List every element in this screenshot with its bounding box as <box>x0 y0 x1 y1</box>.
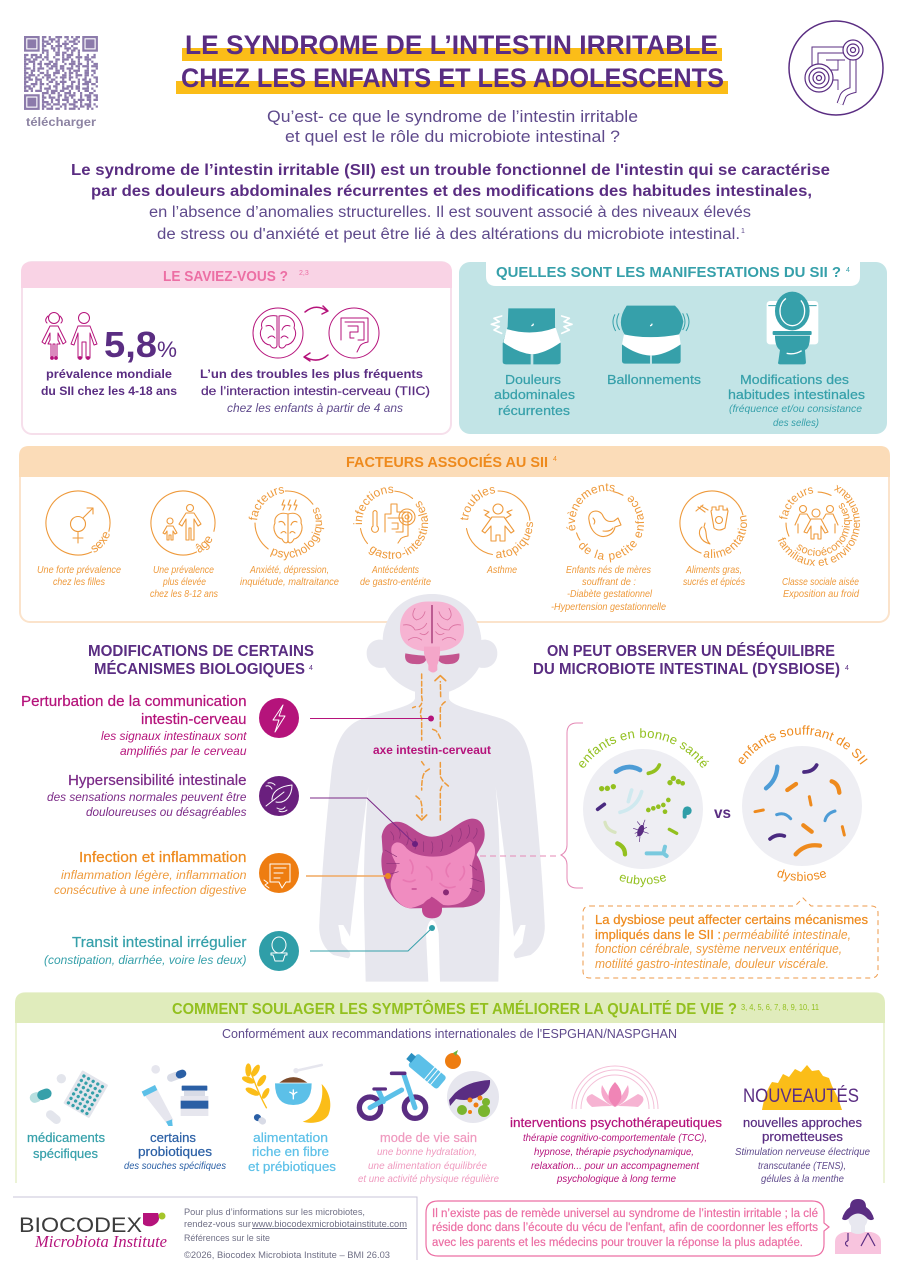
mechanism: infection: inflammation légère, inflammation <box>61 868 247 882</box>
callout: conclusion <box>426 1201 829 1256</box>
mechanism: transit: (constipation, diarrhée, voire les deux) <box>44 953 247 967</box>
subtitle: et quel est le rôle du microbiote intestinal ? <box>285 128 620 146</box>
heading: modifications biologiques <box>88 643 314 678</box>
factor: socioéconomiques: Classe sociale aisée <box>782 576 859 588</box>
labels: symptoms: Ballonnements <box>607 372 702 387</box>
labels: symptoms: (fréquence et/ou consistance <box>729 403 862 415</box>
factor: sexe: chez les filles <box>53 576 106 588</box>
label: mode de vie <box>358 1130 499 1185</box>
heading: facteurs: FACTEURS ASSOCIÉS AU SII <box>346 454 548 471</box>
heading: manifestations: QUELLES SONT LES MANIFESTATIONS DU SII ? <box>496 265 841 281</box>
text: recommandations: Conformément aux recommandations internationales de l'ESPGHAN/NASPGHAN <box>222 1026 677 1041</box>
factor: sexe: Une forte prévalence <box>37 564 121 576</box>
label: médicaments <box>27 1130 106 1161</box>
statistic 5,8%: % <box>157 337 177 362</box>
icon: inflamed intestine <box>259 853 299 893</box>
factor: évènements de la petite enfance <box>551 483 666 613</box>
mechanism: communication <box>21 694 434 758</box>
icon: bloating <box>613 306 689 364</box>
intro text block: par des douleurs abdominales récurrentes et des modifications des habitudes intestinales, <box>91 183 812 200</box>
footer text <box>184 1207 407 1261</box>
text: troubles <box>200 367 430 415</box>
logo: Biocodex: Microbiota Institute <box>34 1232 167 1251</box>
label: mode de vie: mode de vie sain <box>380 1130 477 1145</box>
heading: modifications biologiques: 4 <box>309 665 313 672</box>
label: nouvelles approches: gélules à la menthe <box>761 1173 844 1185</box>
callout: dysbiose: perméabilité intestinale, <box>722 928 851 942</box>
icon: nouveautés sun <box>743 1065 859 1110</box>
panel: facteurs associés <box>19 446 890 623</box>
factor: évènements de la petite enfance: -Diabète gestationnel <box>567 588 653 600</box>
label: alimentation <box>248 1130 337 1174</box>
heading: soulager: 3, 4, 5, 6, 7, 8, 9, 10, 11 <box>741 1003 820 1012</box>
label: nouvelles approches: prometteuses <box>762 1129 844 1144</box>
panel: soulager les symptômes <box>15 993 885 1185</box>
text: prevalence: prévalence mondiale <box>46 367 172 381</box>
labels: symptoms: récurrentes <box>498 403 571 418</box>
chart: eubiosis circle: eubyose <box>620 874 666 888</box>
factor: évènements de la petite enfance: -Hypertension gestationnelle <box>551 601 666 613</box>
label: mode de vie: une alimentation équilibrée <box>368 1160 487 1172</box>
factor: psychologiques: Anxiété, dépression, <box>249 564 329 576</box>
panel: le saviez-vous <box>21 262 452 434</box>
mechanism: communication: intestin-cerveau <box>141 712 246 728</box>
mechanism: communication: Perturbation de la communication <box>21 694 246 710</box>
factor: évènements de la petite enfance: souffrant de : <box>582 576 636 588</box>
mechanism: transit: Transit intestinal irrégulier <box>72 935 247 951</box>
title <box>176 30 728 94</box>
factor: infections gastro-intestinales: infections <box>353 486 394 524</box>
icon: fibre food <box>241 1063 330 1126</box>
text: troubles: chez les enfants à partir de 4 ans <box>227 403 403 415</box>
icon: nouveautés sun: NOUVEAUTÉS <box>743 1086 859 1107</box>
statistic 5,8%: 5,8 <box>104 324 157 365</box>
factor: troubles atopiques: Asthme <box>486 564 517 576</box>
heading: modifications biologiques: MODIFICATIONS DE CERTAINS <box>88 643 314 660</box>
mechanism: hypersensibilité: douloureuses ou désagréables <box>86 805 246 819</box>
labels: symptoms: habitudes intestinales <box>728 387 866 402</box>
factor: alimentation: alimentation <box>704 515 748 558</box>
callout: dysbiose <box>583 898 878 978</box>
label: mode de vie: et une activité physique régulière <box>358 1173 499 1185</box>
label: interventions: interventions psychothérapeutiques <box>510 1115 723 1130</box>
factor: alimentation: sucrés et épicés <box>683 576 746 588</box>
title: CHEZ LES ENFANTS ET LES ADOLESCENTS <box>181 63 724 93</box>
callout: conclusion: Il n’existe pas de remède universel au syndrome de l’intestin irritable ; la clé <box>432 1208 818 1220</box>
icon: doctor <box>835 1199 881 1254</box>
axis label: axe intestin-cerveaut <box>373 745 491 757</box>
icon: children <box>42 312 97 359</box>
callout: conclusion: avec les parents et les médecins pour trouver la réponse la plus adaptée. <box>432 1237 803 1249</box>
heading: dysbiose: DU MICROBIOTE INTESTINAL (DYSBIOSE) <box>533 661 840 678</box>
footer text: ©2026, Biocodex Microbiota Institute – BMI 26.03 <box>184 1250 390 1261</box>
chart: dysbiosis circle <box>738 725 868 882</box>
text: prevalence <box>41 367 177 398</box>
labels: symptoms <box>494 372 866 429</box>
axis arrows <box>413 674 448 820</box>
factor: évènements de la petite enfance: évènements <box>566 483 615 531</box>
factor: âge: chez les 8-12 ans <box>150 588 219 600</box>
factor: socioéconomiques: Exposition au froid <box>783 588 860 600</box>
dashed link and bracket <box>480 723 583 888</box>
factor: infections gastro-intestinales: de gastro-entérite <box>360 576 431 588</box>
title: LE SYNDROME DE L’INTESTIN IRRITABLE <box>185 30 718 60</box>
factor: infections gastro-intestinales <box>353 486 431 588</box>
intro text block <box>71 162 830 243</box>
icon: toilet <box>767 292 818 364</box>
mechanism: infection: Infection et inflammation <box>79 850 246 866</box>
label: probiotiques: probiotiques <box>138 1144 213 1159</box>
callout: dysbiose: impliqués dans le SII : <box>595 928 721 942</box>
intro text block: Le syndrome de l’intestin irritable (SII) est un trouble fonctionnel de l'intestin qui se caractérise <box>71 162 830 179</box>
icon: probiotics <box>142 1065 208 1126</box>
icon: feather <box>259 776 299 816</box>
mechanism: hypersensibilité: Hypersensibilité intestinale <box>68 773 246 789</box>
text: troubles: L’un des troubles les plus fréquents <box>200 367 423 381</box>
heading: dysbiose: 4 <box>845 665 849 672</box>
icon: abdominal pain <box>491 308 572 364</box>
factor: âge: plus élevée <box>162 576 206 588</box>
factor: alimentation: Aliments gras, <box>685 564 742 576</box>
heading: le saviez-vous: LE SAVIEZ-VOUS ? <box>163 269 288 285</box>
factor: alimentation <box>679 490 748 588</box>
chart: dysbiosis circle: enfants souffrant de SII <box>738 725 868 765</box>
icon: brain-gut interaction <box>253 306 379 361</box>
label: interventions: hypnose, thérapie psychodynamique, <box>534 1146 694 1158</box>
mechanism: communication: amplifiés par le cerveau <box>120 744 247 758</box>
factor: psychologiques: inquiétude, maltraitance <box>240 576 339 588</box>
brain <box>400 602 464 672</box>
label: médicaments: médicaments <box>27 1130 106 1145</box>
text: troubles: de l’interaction intestin-cerveau (TIIC) <box>201 384 430 398</box>
mechanism: communication: les signaux intestinaux sont <box>101 729 247 743</box>
label: médicaments: spécifiques <box>33 1146 98 1161</box>
heading: facteurs: 4 <box>553 456 557 463</box>
heading: soulager: COMMENT SOULAGER LES SYMPTÔMES ET AMÉLIORER LA QUALITÉ DE VIE ? <box>172 1000 737 1018</box>
chart: eubiosis circle <box>579 728 710 888</box>
callout: dysbiose: fonction cérébrale, système nerveux entérique, <box>595 942 842 956</box>
text: prevalence: du SII chez les 4-18 ans <box>41 384 177 398</box>
factor: sexe <box>37 490 121 588</box>
factor: socioéconomiques: familiaux et environnementaux <box>778 484 860 566</box>
label: interventions: relaxation... pour un accompagnement <box>531 1160 700 1172</box>
mechanism: infection <box>54 850 391 897</box>
mechanism: hypersensibilité: des sensations normales peuvent être <box>47 790 247 804</box>
factor: troubles atopiques <box>460 487 534 576</box>
factor: socioéconomiques: facteurs <box>779 487 814 519</box>
factor: psychologiques <box>240 487 339 588</box>
heading: manifestations: 4 <box>846 267 850 274</box>
subtitle: Qu’est- ce que le syndrome de l’intestin irritable <box>267 108 638 126</box>
intro text block: en l’absence d’anomalies structurelles. Il est souvent associé à des niveaux élevés <box>149 204 751 221</box>
factor: infections gastro-intestinales: Antécédents <box>371 564 420 576</box>
labels: symptoms: Douleurs <box>505 372 562 387</box>
callout: conclusion: réside donc dans l’écoute du vécu de l'enfant, afin de coordonner les efforts <box>432 1222 818 1234</box>
footer divider <box>13 1197 417 1260</box>
labels: symptoms: abdominales <box>494 387 576 402</box>
label: mode de vie: une bonne hydratation, <box>377 1146 477 1158</box>
chart: eubiosis circle: enfants en bonne santé <box>579 728 710 768</box>
factor: âge <box>150 490 219 600</box>
factor: psychologiques: psychologiques <box>270 508 324 560</box>
QR code <box>24 37 98 129</box>
footer text: Pour plus d’informations sur les microbiotes, <box>184 1207 365 1218</box>
factor: âge: Une prévalence <box>153 564 214 576</box>
logo: Biocodex <box>19 1212 167 1251</box>
label: nouvelles approches: Stimulation nerveuse électrique <box>735 1146 870 1158</box>
label: probiotiques: certains <box>150 1130 196 1145</box>
label: alimentation: riche en fibre <box>252 1144 329 1159</box>
subtitle <box>267 108 638 146</box>
factor: évènements de la petite enfance: Enfants nés de mères <box>566 564 652 576</box>
heading: le saviez-vous: 2,3 <box>299 270 309 277</box>
icon: medicines <box>28 1070 108 1126</box>
intestine <box>381 819 485 918</box>
icon: lightning <box>259 698 299 738</box>
label: nouvelles approches: nouvelles approches <box>743 1115 862 1130</box>
heading: dysbiose: ON PEUT OBSERVER UN DÉSÉQUILIBRE <box>547 643 835 660</box>
heading: dysbiose <box>533 643 849 678</box>
icon: bike, bottle, plate <box>359 1050 499 1123</box>
factor: socioéconomiques <box>778 484 860 600</box>
label: probiotiques <box>124 1130 227 1172</box>
chart: dysbiosis circle: dysbiose <box>777 869 826 882</box>
icon: intestine in circle <box>789 21 883 115</box>
label: probiotiques: des souches spécifiques <box>124 1160 227 1172</box>
label: interventions: thérapie cognitivo-comportementale (TCC), <box>523 1132 707 1144</box>
factor: psychologiques: facteurs <box>248 487 284 520</box>
label: interventions: psychologique à long terme <box>556 1173 676 1185</box>
factor: âge: âge <box>196 536 212 552</box>
footer text: rendez-vous sur <box>184 1219 251 1230</box>
heading: modifications biologiques: MÉCANISMES BIOLOGIQUES <box>94 661 305 678</box>
callout: dysbiose: motilité gastro-intestinale, douleur viscérale. <box>595 957 829 971</box>
label: alimentation: et prébiotiques <box>248 1159 337 1174</box>
panel: manifestations <box>459 262 887 434</box>
icon: toilet <box>259 931 299 971</box>
body silhouette with brain and intestine <box>319 594 545 982</box>
factor: socioéconomiques: socioéconomiques <box>796 503 852 556</box>
footer text: www.biocodexmicrobiotainstitute.com <box>251 1219 407 1230</box>
callout: dysbiose: La dysbiose peut affecter certains mécanismes <box>595 913 868 927</box>
factor: sexe: sexe <box>91 532 110 552</box>
label: interventions <box>510 1115 723 1185</box>
label: nouvelles approches <box>735 1115 870 1185</box>
label: vs: vs <box>714 805 731 822</box>
icon: lotus <box>572 1066 658 1109</box>
factor: évènements de la petite enfance: de la petite enfance <box>579 496 644 562</box>
labels: symptoms: des selles) <box>773 417 819 429</box>
label: alimentation: alimentation <box>253 1130 328 1145</box>
intro text block: de stress ou d'anxiété et peut être lié à des altérations du microbiote intestinal. <box>157 226 740 243</box>
factor: troubles atopiques: troubles <box>460 487 496 520</box>
mechanism: hypersensibilité <box>47 773 418 847</box>
statistic 5,8% <box>104 324 177 365</box>
intro text block: 1 <box>741 228 745 235</box>
factor: infections gastro-intestinales: gastro-intestinales <box>368 501 428 559</box>
labels: symptoms: Modifications des <box>740 372 850 387</box>
mechanism: infection: consécutive à une infection digestive <box>54 883 247 897</box>
mechanism: transit <box>44 925 435 971</box>
factor: troubles atopiques: atopiques <box>496 522 534 558</box>
logo: Biocodex: BIOCODEX <box>19 1214 142 1237</box>
footer text: Références sur le site <box>184 1233 270 1244</box>
label: nouvelles approches: transcutanée (TENS), <box>758 1160 846 1172</box>
QR code: télécharger <box>26 115 96 129</box>
